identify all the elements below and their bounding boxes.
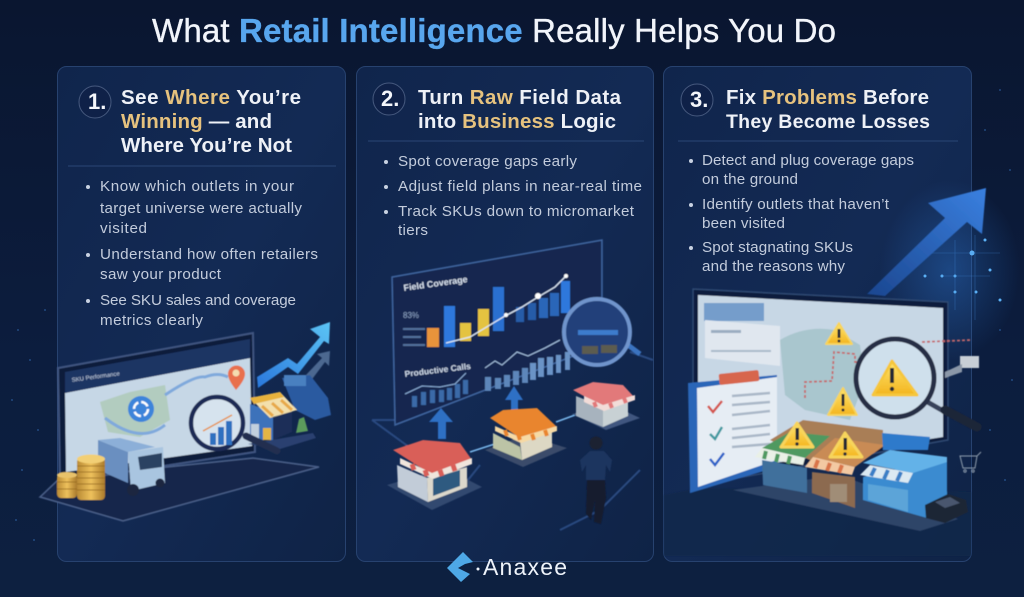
shop and delivery van bbox=[248, 375, 331, 449]
ground path lines bbox=[372, 352, 653, 530]
big growth arrow bbox=[867, 188, 986, 296]
productive calls chart bbox=[404, 340, 570, 407]
heading 1: See Where You’re bbox=[121, 86, 301, 109]
small alert icon top bbox=[826, 323, 852, 344]
bullet list 2: Track SKUs down to micromarket bbox=[398, 203, 635, 220]
car bbox=[925, 494, 968, 523]
bullet list 3 bbox=[689, 152, 914, 275]
bullet list 1: Know which outlets in your bbox=[100, 178, 294, 195]
dashboard bbox=[392, 240, 602, 425]
connector arrows bbox=[470, 411, 586, 452]
laptop screen bbox=[58, 333, 255, 482]
growth arrows bbox=[257, 322, 330, 388]
step number 1 bbox=[79, 86, 111, 118]
map regions bbox=[100, 385, 170, 437]
heading 2: into Business Logic bbox=[418, 110, 616, 133]
bullet list 1: visited bbox=[100, 220, 147, 237]
bullet list 1: target universe were actually bbox=[100, 200, 302, 217]
coins bbox=[57, 454, 105, 500]
green shop bbox=[755, 432, 830, 493]
magnifier with alert bbox=[856, 339, 977, 427]
shop alert icon left bbox=[781, 423, 813, 447]
step number 2 bbox=[373, 83, 405, 115]
bullet list 2 bbox=[384, 153, 642, 239]
up arrows bbox=[429, 386, 523, 439]
shopping cart bbox=[960, 452, 981, 472]
glowing data grid bbox=[880, 180, 1020, 360]
bullet list 3: been visited bbox=[702, 215, 785, 232]
panel: see where you're winning bbox=[40, 66, 346, 562]
monitor bbox=[693, 289, 972, 486]
bullet list 3: on the ground bbox=[702, 171, 798, 188]
row of shops bbox=[733, 420, 958, 531]
shop alert icon right bbox=[830, 433, 862, 457]
laptop screen: SKU Performance bbox=[71, 371, 121, 384]
productive calls chart: Productive Calls bbox=[404, 361, 472, 379]
bullet list 2: Spot coverage gaps early bbox=[398, 153, 577, 170]
bullet list 3: Identify outlets that haven’t bbox=[702, 196, 890, 213]
shop right bbox=[572, 382, 640, 430]
camera on wall bbox=[945, 356, 979, 378]
step number 3 bbox=[681, 84, 713, 116]
bullet list 3: Spot stagnating SKUs bbox=[702, 239, 853, 256]
orange shop bbox=[805, 438, 885, 508]
title: What Retail Intelligence Really Helps You Do bbox=[152, 12, 836, 49]
heading 1 bbox=[121, 86, 301, 157]
step number 1: 1. bbox=[88, 89, 106, 114]
bullet list 1: Understand how often retailers bbox=[100, 246, 318, 263]
brand logo bbox=[447, 552, 567, 582]
bullet list 3: Detect and plug coverage gaps bbox=[702, 152, 914, 169]
field worker bbox=[580, 436, 612, 524]
shop left bbox=[387, 440, 482, 510]
illustration: field coverage dashboard and shops bbox=[372, 240, 653, 530]
bullet list 1 bbox=[86, 178, 318, 329]
clipboard checklist bbox=[688, 370, 777, 493]
step number 2: 2. bbox=[381, 86, 399, 111]
magnifier bbox=[191, 397, 277, 451]
step number 3: 3. bbox=[690, 87, 708, 112]
dashboard: 83% bbox=[403, 311, 419, 320]
bar chart bbox=[427, 274, 570, 347]
magnifier bbox=[564, 299, 640, 365]
map area bbox=[780, 329, 865, 420]
laptop base bbox=[40, 458, 319, 521]
small alert icon middle bbox=[828, 388, 857, 415]
bullet list 3: and the reasons why bbox=[702, 258, 845, 275]
brand logo: Anaxee bbox=[483, 554, 567, 580]
heading 1: Where You’re Not bbox=[121, 134, 292, 157]
heading 3 bbox=[726, 86, 930, 133]
heading 1: Winning — and bbox=[121, 110, 272, 133]
truck bbox=[98, 438, 165, 496]
bullet list 2: Adjust field plans in near-real time bbox=[398, 178, 642, 195]
heading 2 bbox=[418, 86, 622, 133]
bullet list 1: See SKU sales and coverage bbox=[100, 292, 296, 309]
heading 3: They Become Losses bbox=[726, 111, 930, 133]
panel: fix problems bbox=[664, 66, 1020, 562]
shop middle bbox=[485, 408, 567, 467]
map pin bbox=[228, 366, 245, 390]
ground bbox=[664, 488, 971, 556]
heading 2: Turn Raw Field Data bbox=[418, 86, 622, 109]
heading 3: Fix Problems Before bbox=[726, 86, 929, 109]
bullet list 2: tiers bbox=[398, 222, 428, 239]
panel: raw field data bbox=[356, 66, 654, 562]
illustration: monitor, clipboard, shops, alerts bbox=[664, 289, 981, 556]
dashboard: Field Coverage bbox=[403, 274, 468, 293]
blue shop bbox=[860, 433, 947, 518]
illustration: laptop with map, truck, coins, magnifier bbox=[40, 322, 331, 521]
logo mark bbox=[447, 552, 473, 582]
bullet list 1: saw your product bbox=[100, 266, 222, 283]
bullet list 1: metrics clearly bbox=[100, 312, 203, 329]
